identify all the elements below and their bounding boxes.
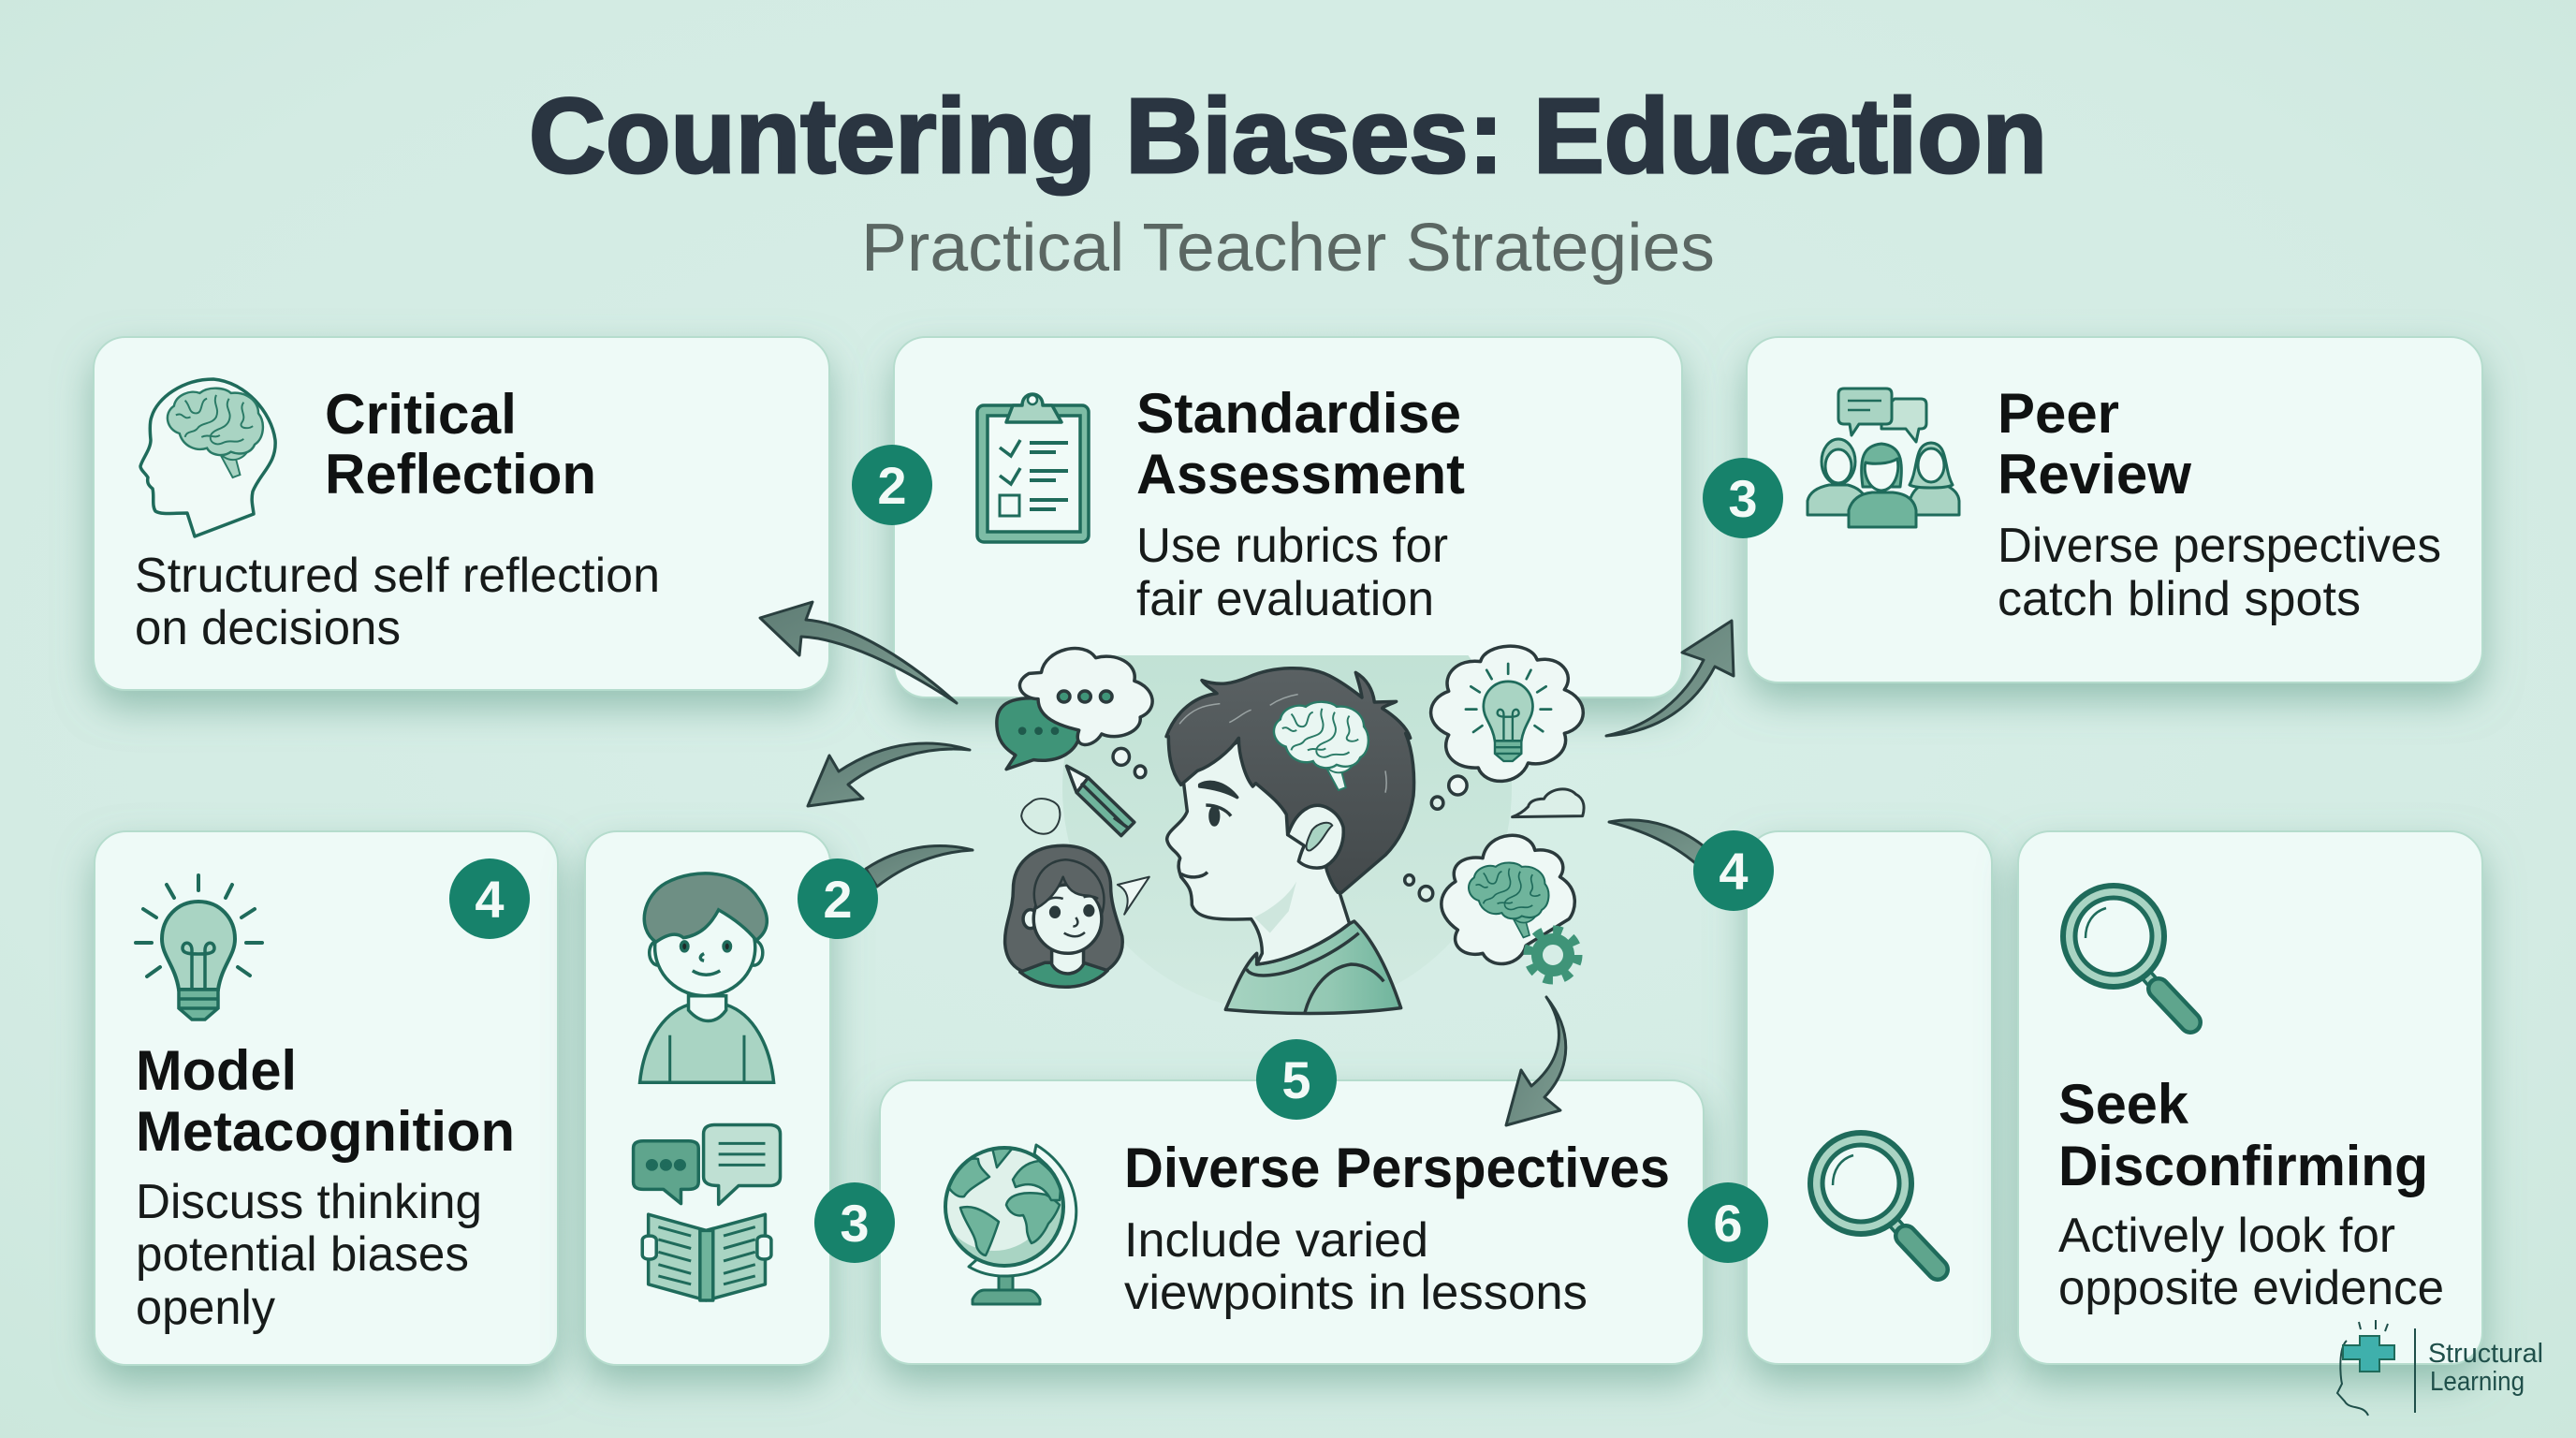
arrow: to left lower [808, 743, 970, 806]
badge 5: diverse perspectives [1256, 1039, 1337, 1120]
icon: student [640, 873, 774, 1082]
description [136, 1175, 482, 1335]
description: Include varied [1124, 1213, 1428, 1268]
arrow: to diverse perspectives [1506, 997, 1566, 1125]
heading: Metacognition [136, 1100, 515, 1163]
badge 2: student: 2 [823, 870, 853, 929]
badge 3: reading: 3 [840, 1194, 870, 1253]
description: Use rubrics for [1136, 519, 1448, 573]
description: viewpoints in lessons [1124, 1266, 1588, 1320]
logo: Structural Learning: Structural [2428, 1339, 2543, 1369]
central illustration: thinking child [997, 646, 1584, 1013]
badge 4: model metacognition [449, 858, 530, 939]
description [1136, 519, 1448, 626]
subtitle: Practical Teacher Strategies [861, 211, 1715, 286]
description: Diverse perspectives [1998, 519, 2441, 573]
description: catch blind spots [1998, 572, 2361, 626]
child profile [1166, 668, 1414, 1013]
icon: globe [938, 1138, 1076, 1304]
description: opposite evidence [2058, 1261, 2444, 1315]
badge 3: peer review: 3 [1728, 469, 1758, 528]
badge 2: standardise: 2 [877, 456, 907, 515]
arrow: to magnifier badge [1609, 820, 1718, 873]
logo: Structural Learning: Learning [2430, 1367, 2525, 1397]
icon: speech bubbles over open book [634, 1124, 781, 1300]
logo: Structural Learning [2337, 1320, 2543, 1416]
panel: magnifier card [1747, 831, 1992, 1364]
panel: standardise assessment [894, 337, 1682, 697]
description [135, 549, 660, 655]
heading [136, 1039, 515, 1163]
arrow: to student badge [866, 846, 973, 887]
heading [2058, 1073, 2428, 1197]
panel: seek disconfirming [2018, 831, 2482, 1364]
speech and thought bubbles [997, 649, 1152, 836]
panel: model metacognition [95, 831, 558, 1365]
lightbulb thought cloud [1405, 646, 1584, 901]
description: fair evaluation [1136, 572, 1434, 626]
badge 4: magnifier: 4 [1719, 842, 1749, 901]
description: openly [136, 1281, 275, 1335]
heading: Standardise [1136, 382, 1461, 445]
badge 4: magnifier [1693, 830, 1774, 911]
heading: Reflection [325, 443, 596, 506]
heading: Diverse Perspectives [1124, 1137, 1670, 1199]
heading: Review [1998, 443, 2191, 506]
heading: Critical [325, 383, 517, 446]
icon: peers with speech bubbles [1808, 389, 1959, 527]
description: Structured self reflection [135, 549, 660, 603]
brain in cloud [1469, 863, 1548, 937]
icon: head with brain [140, 379, 275, 536]
icon: clipboard checklist [977, 394, 1089, 542]
panel: peer review [1747, 337, 2482, 682]
heading: Seek [2058, 1073, 2189, 1136]
badge 3: peer review [1703, 458, 1783, 538]
description: potential biases [136, 1227, 469, 1282]
central illustration backdrop [1062, 655, 1512, 929]
badge 2: standardise [852, 445, 932, 525]
badge 2: student [798, 858, 878, 939]
brain in hair [1274, 702, 1368, 790]
heading: Peer [1998, 382, 2119, 445]
arrow: to critical reflection [760, 602, 957, 703]
heading: Model [136, 1039, 297, 1102]
badge 5: diverse perspectives: 5 [1281, 1050, 1311, 1109]
badge 3: reading [814, 1182, 895, 1263]
icon: magnifying glass [2063, 886, 2190, 1022]
description [1998, 519, 2441, 626]
badge 4: model metacognition: 4 [475, 870, 505, 929]
heading [1998, 382, 2191, 506]
heading [325, 383, 596, 506]
panel: student and reading [585, 831, 830, 1365]
badge 6: diverse perspectives right: 6 [1713, 1194, 1743, 1253]
arrow: to peer review [1606, 621, 1734, 736]
icon: lightbulb [136, 875, 262, 1020]
brain thought cloud [1442, 835, 1574, 964]
lightbulb in cloud [1466, 664, 1551, 761]
description: on decisions [135, 601, 401, 655]
heading: Assessment [1136, 443, 1465, 506]
badge 6: diverse perspectives right [1688, 1182, 1768, 1263]
title: Countering Biases: Education [529, 77, 2047, 195]
description: Discuss thinking [136, 1175, 482, 1229]
icon: magnifying glass [1810, 1133, 1938, 1269]
girl portrait [1005, 845, 1149, 987]
description [2058, 1209, 2444, 1315]
panel: diverse perspectives [880, 1080, 1704, 1364]
heading [1136, 382, 1465, 506]
heading: Disconfirming [2058, 1135, 2428, 1197]
description [1124, 1213, 1588, 1320]
gear [1528, 930, 1578, 980]
description: Actively look for [2058, 1209, 2395, 1263]
panel: critical reflection [94, 337, 829, 690]
